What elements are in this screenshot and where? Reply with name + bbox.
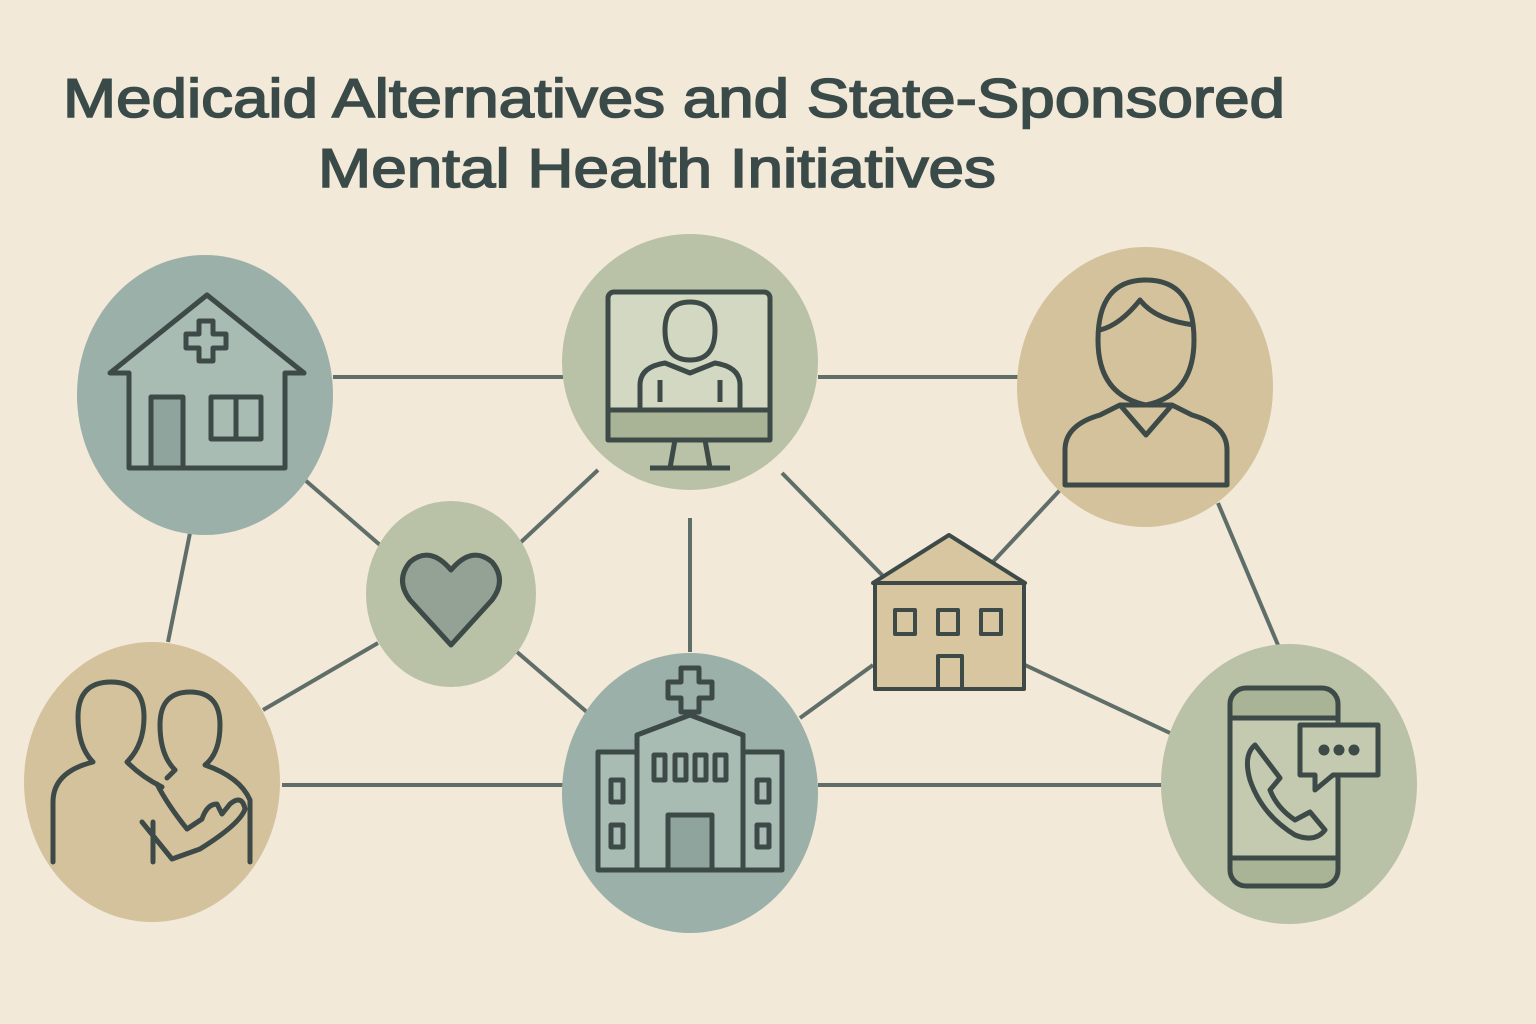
node: person xyxy=(1017,247,1273,527)
title: Medicaid Alternatives and State-Sponsored xyxy=(63,67,1285,129)
node: telehealth monitor xyxy=(562,234,818,490)
connector lines xyxy=(168,377,1278,785)
node: peer support people xyxy=(24,642,280,922)
node: heart xyxy=(366,501,536,687)
node: clinic house xyxy=(77,255,333,535)
node: hospital xyxy=(562,653,818,933)
title: Mental Health Initiatives xyxy=(318,137,996,199)
node: phone hotline xyxy=(1161,644,1417,924)
title xyxy=(63,67,1285,199)
node: community building xyxy=(873,535,1025,689)
